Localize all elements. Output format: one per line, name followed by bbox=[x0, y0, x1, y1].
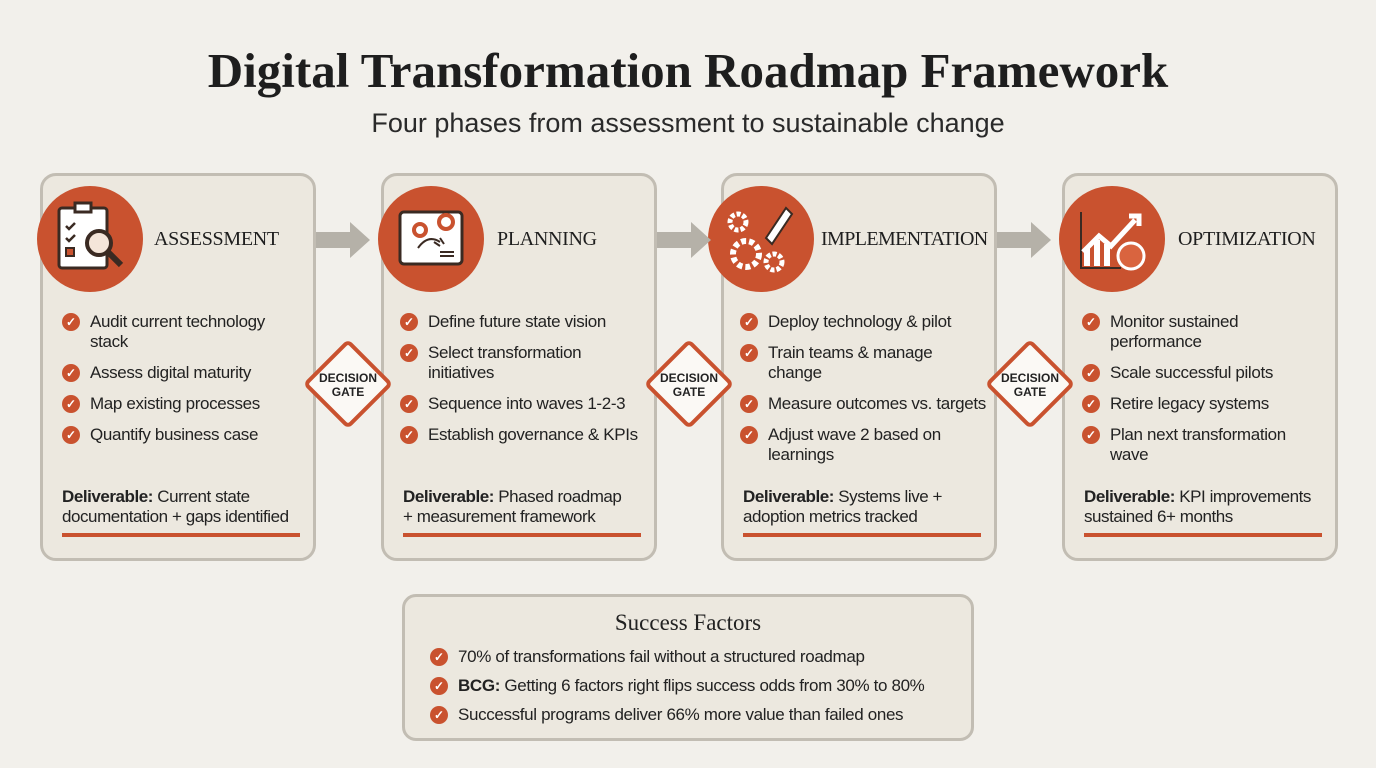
bullets: implementation: learnings bbox=[768, 445, 834, 464]
text: DECISION bbox=[319, 371, 377, 385]
icon: clipboard bbox=[37, 186, 143, 292]
bullets: planning: Select transformation bbox=[428, 343, 581, 362]
deliverable: assessment: Deliverable: Current state bbox=[62, 487, 250, 506]
bullets: optimization: Plan next transformation bbox=[1110, 425, 1286, 444]
bullets: planning: Sequence into waves 1-2-3 bbox=[428, 394, 625, 413]
text: GATE bbox=[673, 385, 705, 399]
subtitle: Four phases from assessment to sustainable change bbox=[371, 108, 1005, 138]
bullets: assessment: Map existing processes bbox=[90, 394, 260, 413]
bullets: optimization: Scale successful pilots bbox=[1110, 363, 1273, 382]
bullets: implementation: Measure outcomes vs. targets bbox=[768, 394, 986, 413]
bullets: success factors: 70% of transformations fail without a structured roadmap bbox=[458, 647, 865, 666]
bullets: assessment: Audit current technology bbox=[90, 312, 265, 331]
panel: implementation bbox=[721, 173, 997, 561]
bullets: planning: Define future state vision bbox=[428, 312, 606, 331]
text: DECISION bbox=[1001, 371, 1059, 385]
panel: success factors bbox=[402, 594, 974, 741]
icon: gears rocket bbox=[708, 186, 814, 292]
deliverable: planning bbox=[403, 487, 622, 526]
bullets: implementation: Adjust wave 2 based on bbox=[768, 425, 941, 444]
deliverable: implementation bbox=[743, 487, 942, 526]
deliverable: assessment bbox=[62, 487, 289, 526]
bullets: assessment: stack bbox=[90, 332, 128, 351]
title: Digital Transformation Roadmap Framework bbox=[208, 43, 1168, 98]
bullets: implementation bbox=[740, 312, 986, 464]
bullets: planning: Establish governance & KPIs bbox=[428, 425, 638, 444]
panel: optimization bbox=[1062, 173, 1338, 561]
bullets: optimization: Retire legacy systems bbox=[1110, 394, 1269, 413]
icon: blueprint bbox=[378, 186, 484, 292]
heading: planning: PLANNING bbox=[497, 228, 597, 250]
text: DECISION bbox=[660, 371, 718, 385]
heading: optimization: OPTIMIZATION bbox=[1178, 228, 1316, 250]
icon: growth chart bbox=[1059, 186, 1165, 292]
arrow 3 bbox=[997, 222, 1051, 258]
heading: assessment: ASSESSMENT bbox=[154, 228, 279, 250]
deliverable: planning: + measurement framework bbox=[403, 507, 595, 526]
arrow 1 bbox=[316, 222, 370, 258]
bullets: planning bbox=[400, 312, 638, 444]
bullets: assessment: Quantify business case bbox=[90, 425, 258, 444]
bullets: implementation: Train teams & manage bbox=[768, 343, 932, 362]
deliverable: implementation: adoption metrics tracked bbox=[743, 507, 917, 526]
bullets: implementation: change bbox=[768, 363, 822, 382]
bullets: success factors bbox=[430, 647, 924, 724]
deliverable: assessment: documentation + gaps identified bbox=[62, 507, 289, 526]
heading: success factors: Success Factors bbox=[615, 610, 761, 635]
bullets: optimization: Monitor sustained bbox=[1110, 312, 1238, 331]
deliverable: planning: Deliverable: Phased roadmap bbox=[403, 487, 621, 506]
bullets: optimization: wave bbox=[1110, 445, 1148, 464]
bullets: success factors: BCG: Getting 6 factors right flips success odds from 30% to 80% bbox=[458, 676, 924, 695]
bullets: optimization: performance bbox=[1110, 332, 1202, 351]
bullets: assessment: Assess digital maturity bbox=[90, 363, 251, 382]
bullets: implementation: Deploy technology & pilot bbox=[768, 312, 951, 331]
deliverable: optimization: Deliverable: KPI improvements bbox=[1084, 487, 1311, 506]
deliverable: implementation: Deliverable: Systems live + bbox=[743, 487, 942, 506]
deliverable: optimization bbox=[1084, 487, 1311, 526]
arrow 2 bbox=[657, 222, 711, 258]
bullets: optimization bbox=[1082, 312, 1286, 464]
heading: implementation: IMPLEMENTATION bbox=[821, 228, 988, 250]
text: GATE bbox=[1014, 385, 1046, 399]
panel: planning bbox=[381, 173, 657, 561]
deliverable: optimization: sustained 6+ months bbox=[1084, 507, 1233, 526]
bullets: planning: initiatives bbox=[428, 363, 494, 382]
text: GATE bbox=[332, 385, 364, 399]
decision gate 1 bbox=[303, 339, 393, 429]
bullets: success factors: Successful programs deliver 66% more value than failed ones bbox=[458, 705, 903, 724]
decision gate 2 bbox=[644, 339, 734, 429]
panel: assessment bbox=[40, 173, 316, 561]
decision gate 3 bbox=[985, 339, 1075, 429]
bullets: assessment bbox=[62, 312, 266, 444]
